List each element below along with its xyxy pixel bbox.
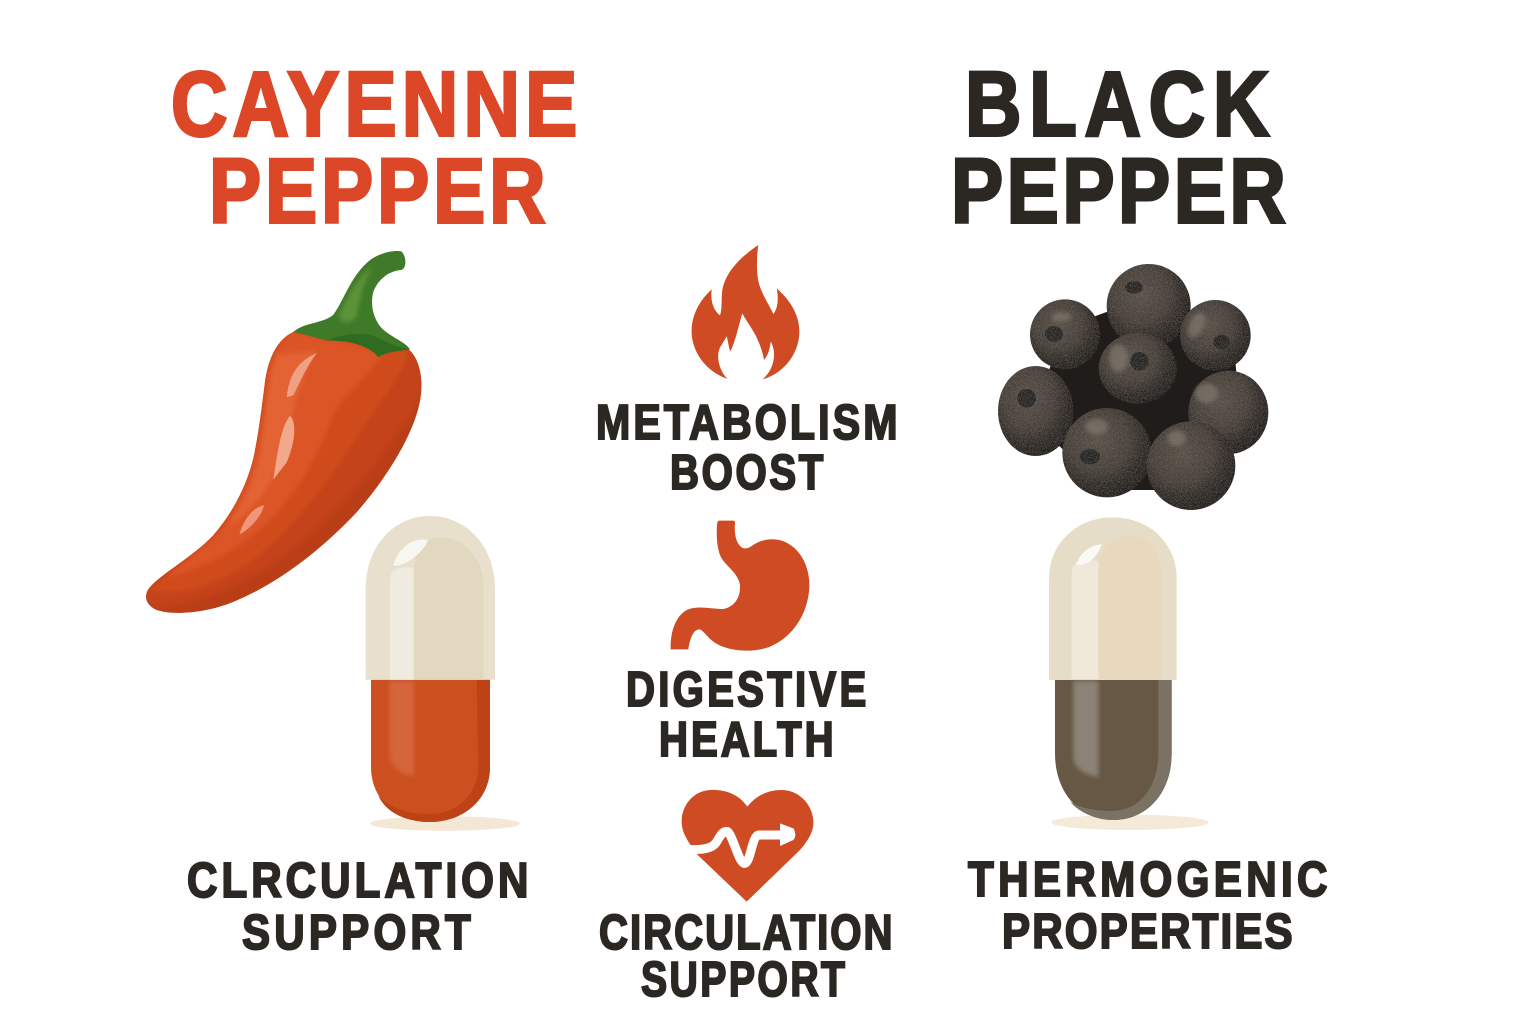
label: clrculation support (left) (187, 853, 528, 960)
label: circulation support (centre) (599, 905, 893, 1007)
label: digestive health: DIGESTIVE (626, 662, 866, 717)
icon: stomach (671, 521, 809, 651)
illustration: black pepper capsule (1049, 517, 1209, 830)
label: thermogenic properties (right): PROPERTIES (1002, 904, 1293, 959)
label: digestive health: HEALTH (659, 712, 834, 767)
label: digestive health (626, 662, 866, 767)
chili stem (293, 251, 410, 357)
title: cayenne pepper: CAYENNE (171, 54, 577, 156)
label: circulation support (centre): CIRCULATION (599, 905, 893, 960)
capsule cap: cream (1049, 517, 1177, 680)
infographic canvas (146, 70, 1328, 998)
title: cayenne pepper: PEPPER (209, 141, 546, 243)
label: clrculation support (left): SUPPORT (242, 905, 471, 960)
capsule cap: cream (366, 516, 495, 680)
label: metabolism boost: BOOST (670, 445, 823, 500)
peppercorn highlights (1052, 310, 1218, 446)
illustration: cayenne chili pepper (146, 251, 423, 615)
label: metabolism boost: METABOLISM (596, 395, 898, 450)
label: thermogenic properties (right): THERMOGENIC (968, 852, 1327, 907)
title: black pepper (951, 54, 1286, 243)
title: black pepper: BLACK (965, 54, 1269, 156)
illustration: black peppercorn cluster (998, 264, 1268, 510)
label: clrculation support (left): CLRCULATION (187, 853, 528, 908)
icon: heart with pulse arrow (677, 790, 813, 902)
illustration: cayenne capsule (366, 516, 520, 831)
capsule shadow (370, 816, 520, 831)
label: circulation support (centre): SUPPORT (641, 953, 845, 1007)
title: cayenne pepper (171, 54, 577, 243)
cluster shadow base (1030, 297, 1240, 490)
capsule shadow (1051, 815, 1209, 830)
label: metabolism boost (596, 395, 898, 500)
icon: flame (692, 245, 799, 379)
title: black pepper: PEPPER (951, 141, 1286, 243)
peppercorns (998, 264, 1268, 510)
chili highlights (239, 353, 317, 534)
label: thermogenic properties (right) (968, 852, 1327, 959)
chili shading (150, 328, 423, 615)
capsule body: ground pepper (1055, 680, 1172, 820)
capsule body: orange powder (371, 680, 490, 822)
